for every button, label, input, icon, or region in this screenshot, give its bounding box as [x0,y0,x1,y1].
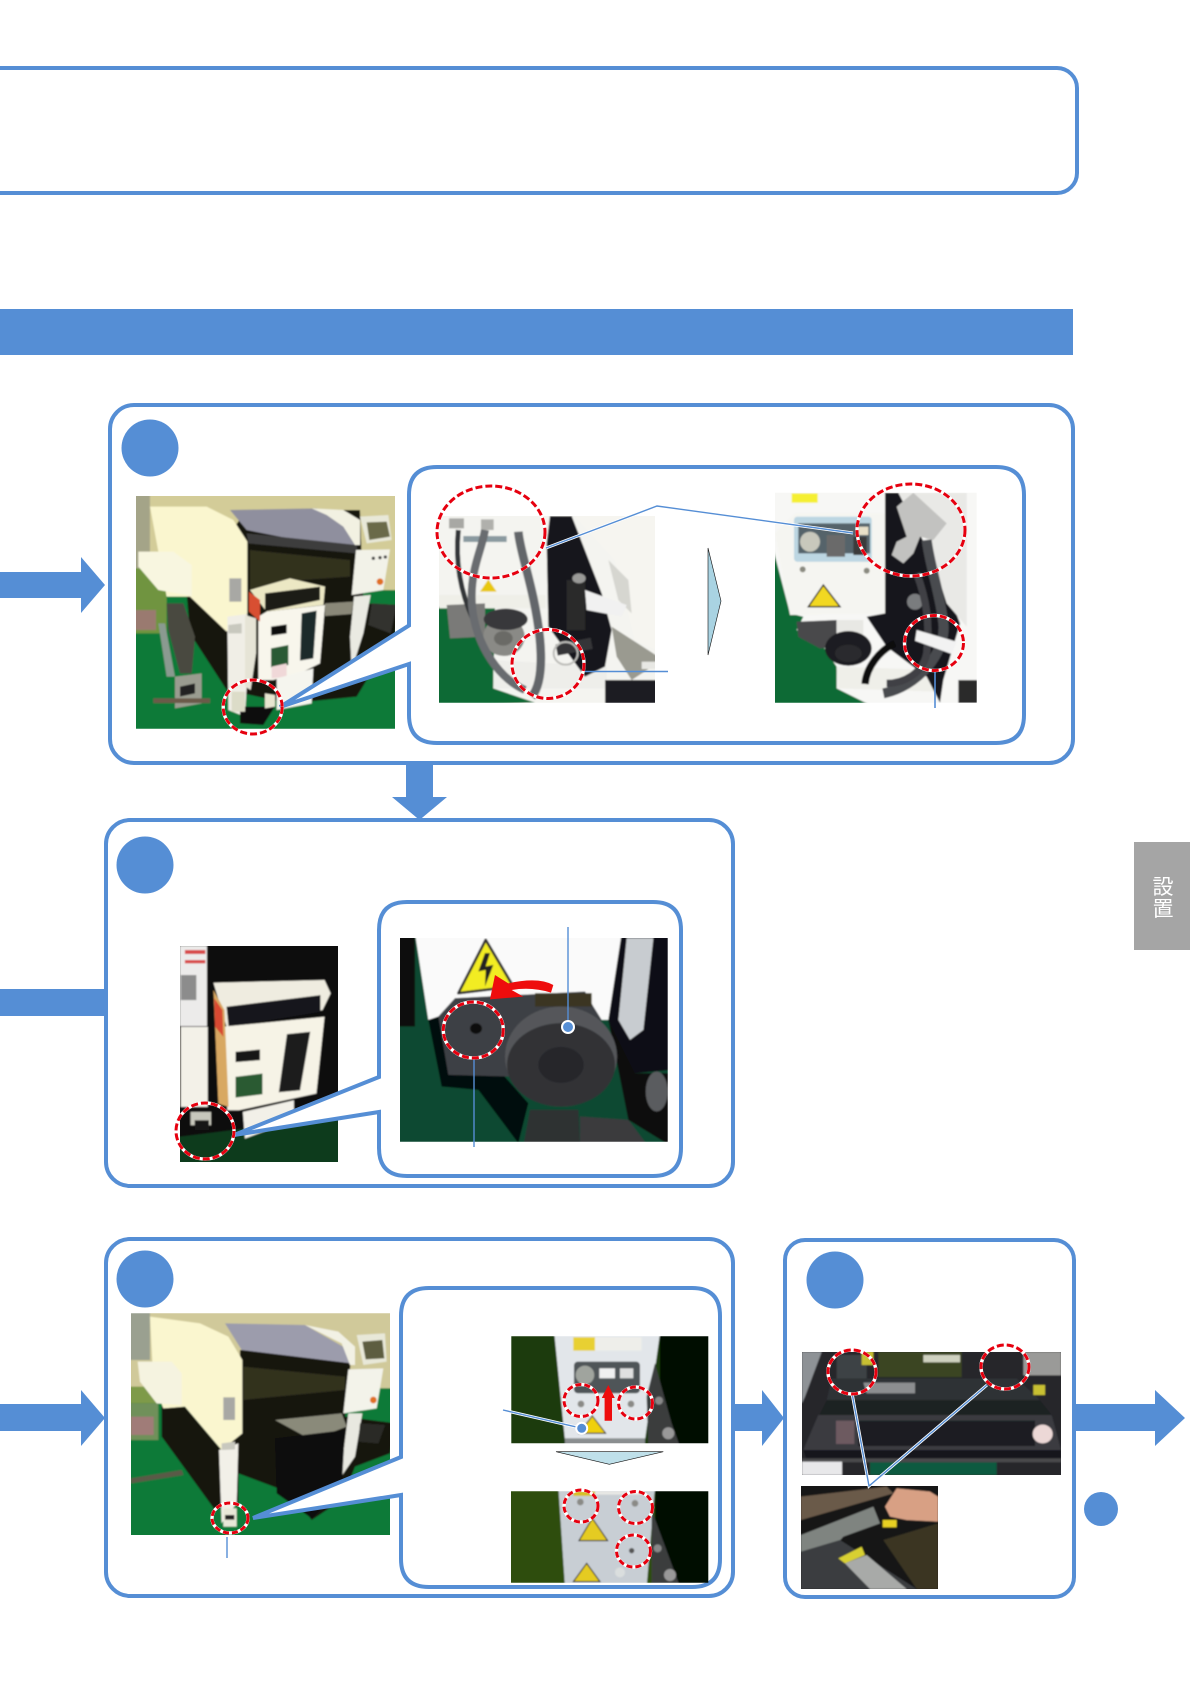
step 3 badge [116,1250,174,1308]
side tab: installation: 設 [1152,876,1174,899]
callout bubble with wedge [234,902,681,1176]
photo: cover with screws upper [511,1336,708,1444]
leader lines [852,1385,987,1486]
red dashed markers [212,1384,652,1567]
panel: step 3 [106,1239,733,1596]
panel: step 2 [106,820,733,1186]
panel: step 4 [785,1240,1074,1597]
step 2 badge [116,836,174,894]
panel: step 1 [110,405,1073,763]
callout bubble with wedge [280,467,1024,743]
photo: whole machine [136,496,395,729]
exit arrow [1076,1390,1185,1446]
photo: cover with screws lower [511,1491,708,1583]
leader lines with dot [474,927,574,1147]
photo: cables after [775,492,977,703]
step 4 badge [806,1252,864,1308]
side tab: installation: 置 [1152,898,1174,921]
small blue badge [1084,1492,1118,1526]
arrow into panel 3 [0,1390,105,1446]
transition triangle [708,548,721,655]
step 1 badge [122,420,178,476]
photo: whole machine side [131,1313,390,1535]
photo: feeder unit [180,946,338,1162]
down arrow from panel 1 to panel 2 [392,763,447,820]
red dashed markers [176,1002,503,1159]
top rounded note box [0,68,1077,193]
photo: cables before [439,516,655,703]
photo: hand adjusting connector [801,1486,938,1589]
icon: red up arrow [602,1385,615,1421]
red dashed markers [223,484,965,734]
arrow into panel 4 [733,1390,784,1446]
leader lines [546,506,935,708]
panel 4 frame [785,1240,1074,1597]
connector bar into panel 2 [0,989,106,1016]
section header bar [0,309,1073,355]
transition triangle [556,1452,663,1464]
photo: head unit from above [802,1352,1061,1475]
red dashed markers [828,1345,1029,1394]
panel 3 frame [106,1239,733,1596]
leader lines with dot [227,1410,587,1558]
panel 2 frame [106,820,733,1186]
side tab: installation [1134,842,1190,950]
photo: knob and hole [400,938,668,1142]
callout bubble with wedge [253,1288,720,1587]
panel 1 frame [110,405,1073,763]
icon: knob rotation arrow [490,975,553,999]
arrow into panel 1 [0,557,105,613]
